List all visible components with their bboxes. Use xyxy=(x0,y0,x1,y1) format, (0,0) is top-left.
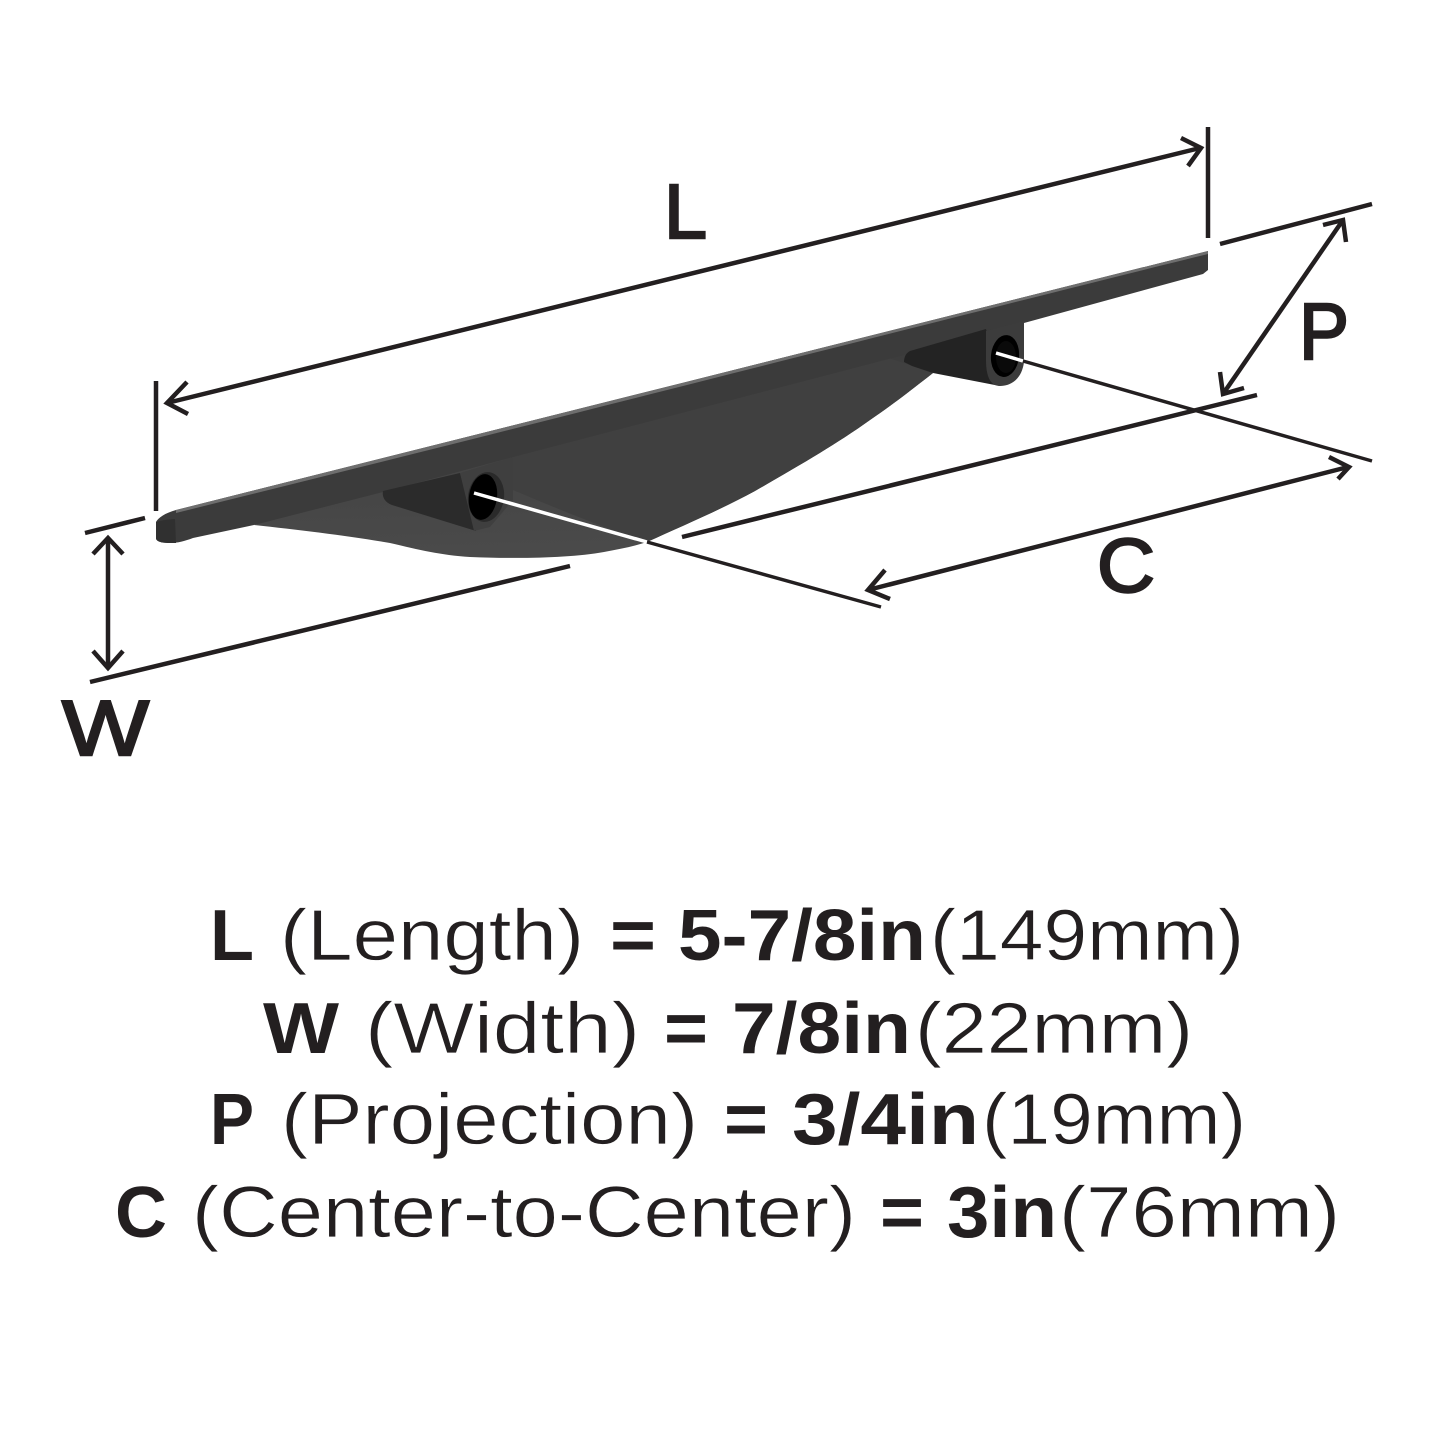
product: cabinet pull handle xyxy=(156,251,1208,558)
spec line: projection: (Projection) xyxy=(281,1080,698,1160)
spec line: length: L xyxy=(210,896,254,976)
spec line: width: = xyxy=(664,989,708,1069)
spec line: length xyxy=(210,896,1244,976)
handle top bar xyxy=(156,251,1208,543)
spec line: length: (Length) xyxy=(280,896,584,976)
spec line: length: 5-7/8in xyxy=(678,896,926,976)
spec line: projection xyxy=(210,1080,1246,1160)
spec line: projection: P xyxy=(210,1080,254,1160)
spec line: projection: = xyxy=(724,1080,768,1160)
spec line: width: (Width) xyxy=(365,989,640,1069)
spec line: projection: (19mm) xyxy=(982,1080,1246,1160)
label L: L xyxy=(664,169,707,255)
spec line: center-to-center: (Center-to-Center) xyxy=(192,1173,856,1253)
spec line: center-to-center xyxy=(115,1173,1340,1253)
handle blade body xyxy=(254,340,933,558)
spec line: length: = xyxy=(610,896,656,976)
dimension W: width arrow xyxy=(85,518,570,682)
spec line: center-to-center: = xyxy=(880,1173,924,1253)
handle top highlight xyxy=(176,251,1208,513)
left mounting post xyxy=(383,457,513,531)
specification list xyxy=(115,896,1340,1253)
spec line: center-to-center: (76mm) xyxy=(1059,1173,1340,1253)
spec line: length: (149mm) xyxy=(930,896,1244,976)
label P: P xyxy=(1299,287,1349,376)
blade inner panel xyxy=(513,358,933,542)
center line: right hole xyxy=(996,353,1372,461)
dimension C: center-to-center arrow xyxy=(682,395,1349,599)
handle tip shading xyxy=(156,519,176,543)
spec line: width xyxy=(263,989,1193,1069)
label W: W xyxy=(62,684,149,772)
spec line: width: (22mm) xyxy=(915,989,1193,1069)
spec line: projection: 3/4in xyxy=(792,1080,979,1160)
dimension L: length arrow xyxy=(156,127,1208,511)
dimension P: projection arrow xyxy=(1220,204,1372,394)
spec line: width: 7/8in xyxy=(732,989,911,1069)
right mounting post xyxy=(904,321,1024,386)
spec line: center-to-center: 3in xyxy=(947,1173,1057,1253)
spec line: width: W xyxy=(263,989,339,1069)
spec line: center-to-center: C xyxy=(115,1173,167,1253)
label C: C xyxy=(1097,524,1155,609)
center line: left hole xyxy=(474,493,881,607)
